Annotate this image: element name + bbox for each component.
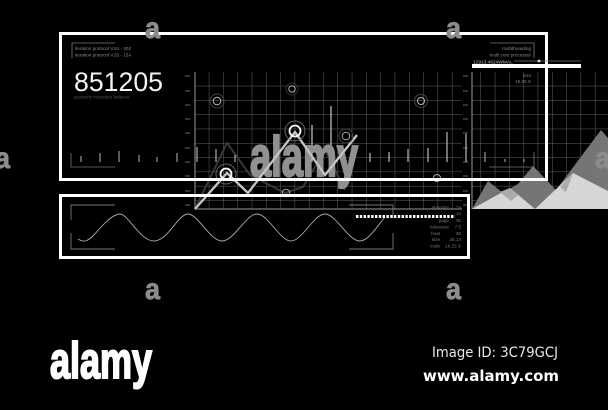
lower-right readout text: tolerance bbox=[430, 224, 449, 230]
vertical bar ticks bbox=[81, 106, 524, 162]
area chart: mountains bbox=[472, 130, 608, 209]
top-right data line bbox=[473, 60, 581, 66]
lower-right readout text: 26.14 bbox=[450, 237, 461, 242]
small watermark icons bbox=[0, 12, 608, 306]
image id: Image ID: 3C79GCJ bbox=[432, 345, 558, 361]
lower-right readout text: code bbox=[430, 244, 440, 248]
top-right status text bbox=[490, 43, 534, 84]
alamy logo: alamy bbox=[50, 332, 152, 389]
lower-right readout text: 36 bbox=[456, 218, 461, 223]
lower-right readout text: heat bbox=[431, 231, 441, 236]
lower-right readout text bbox=[430, 205, 461, 248]
top-left status text: iteration protocol V.91 - 302 bbox=[75, 46, 131, 51]
data point markers bbox=[210, 83, 440, 197]
small watermark icons: a bbox=[446, 12, 461, 45]
lower-right readout text: 14 bbox=[456, 211, 461, 216]
number caption: quarterly monetary balance bbox=[74, 94, 130, 100]
top-right status text: 16.25 S bbox=[515, 79, 531, 84]
dotted progress bar bbox=[356, 215, 455, 218]
main chart grid bbox=[185, 72, 462, 209]
white slider bar bbox=[472, 64, 581, 68]
top-right status text: multi core processor bbox=[490, 52, 531, 58]
lower-right readout text: absolute bbox=[432, 205, 449, 210]
bottom frame panel bbox=[60, 196, 468, 258]
lower-right readout text: 7.5 bbox=[455, 224, 461, 230]
lower-right readout text: 19 bbox=[456, 205, 461, 210]
top-left status text bbox=[72, 43, 132, 58]
top-right status text: multithreading bbox=[502, 46, 531, 51]
sine wave bbox=[78, 214, 385, 241]
big number: 851205 bbox=[74, 67, 163, 97]
lower-right readout text: size bbox=[432, 237, 440, 242]
center watermark: alamy bbox=[250, 125, 358, 189]
wave brackets bbox=[71, 205, 393, 249]
grey secondary line chart bbox=[195, 143, 345, 209]
small watermark icons: a bbox=[145, 273, 160, 306]
lower-right readout text: page bbox=[439, 218, 449, 223]
left bar bracket bbox=[71, 153, 115, 167]
top-right data line: 12913.4624WMAL bbox=[473, 60, 513, 66]
website url: www.alamy.com bbox=[423, 367, 559, 385]
top frame panel bbox=[60, 34, 546, 180]
lower-right readout text: 28 bbox=[456, 231, 461, 236]
lower-right bracket on top panel bbox=[489, 152, 534, 167]
right chart grid bbox=[463, 72, 608, 209]
lower-right readout text: 16.25 S bbox=[445, 244, 461, 248]
top-left status text: iteration protocol V.32 - 15A bbox=[75, 52, 132, 58]
small watermark icons: a bbox=[145, 12, 160, 45]
white line chart bbox=[195, 132, 357, 209]
small watermark icons: a bbox=[446, 273, 461, 306]
top-right status text: size bbox=[523, 73, 531, 78]
